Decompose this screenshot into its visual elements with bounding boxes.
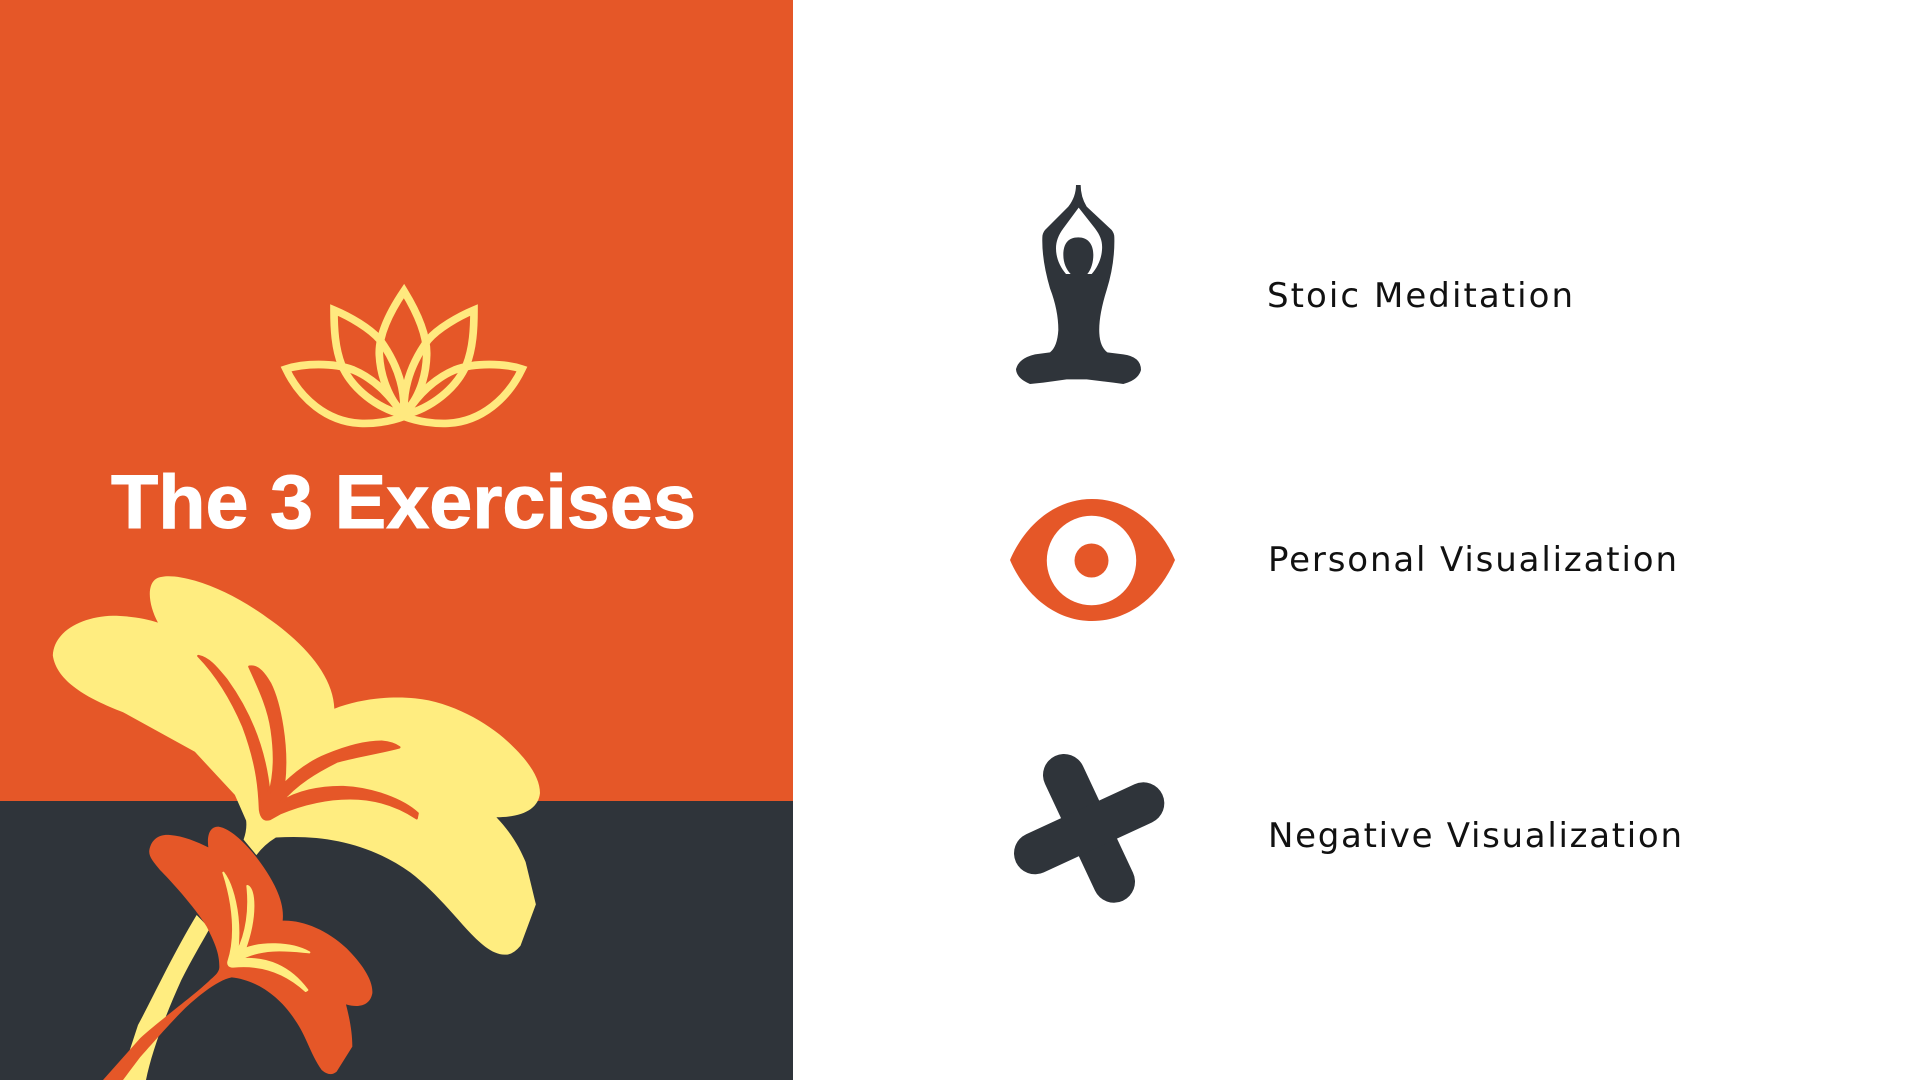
yellow veins of small leaf [223, 873, 309, 991]
icon: lotus flower outline [286, 291, 522, 423]
label: Stoic Meditation: Stoic Meditation [1267, 276, 1573, 316]
title: The 3 Exercises [111, 460, 696, 545]
yellow stem [120, 915, 210, 1080]
orange veins of large leaf [198, 656, 418, 819]
icon: eye [1010, 499, 1175, 621]
panel: left dark background [0, 801, 793, 1080]
label: Personal Visualization: Personal Visualization [1268, 540, 1677, 580]
icon: cross [1035, 775, 1143, 882]
label: Negative Visualization: Negative Visualization [1268, 816, 1682, 856]
small orange leaf with stem [103, 827, 372, 1080]
icon: meditating person [1016, 185, 1141, 384]
illustration: large yellow leaf and small orange leaf [53, 576, 540, 1080]
large yellow leaf [53, 576, 540, 955]
panel: left orange background [0, 0, 793, 801]
